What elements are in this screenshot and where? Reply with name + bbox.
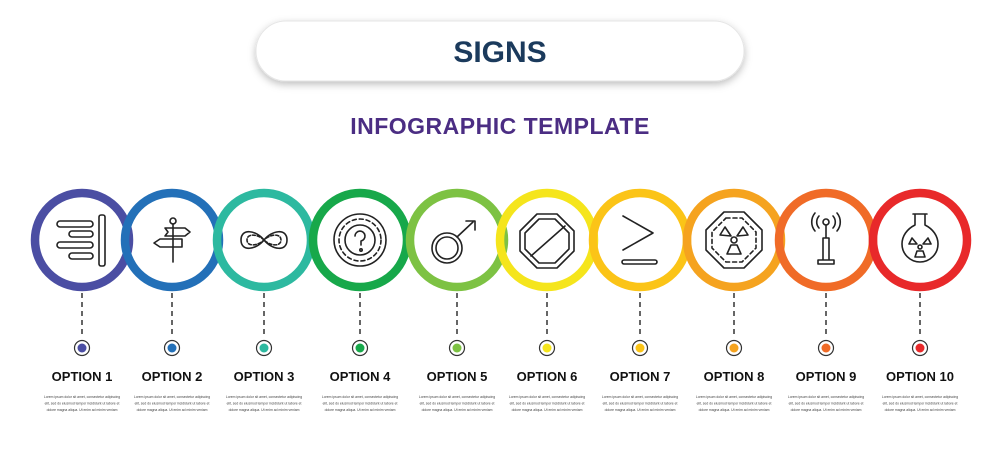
description texts: elit, sed do eiusmod tempor incididunt ut labore et [697,402,771,406]
option labels [52,369,954,384]
description texts: dolore magna aliqua. Ut enim ad minim veniam [605,408,676,412]
dashed connectors [82,293,920,338]
description texts: elit, sed do eiusmod tempor incididunt ut labore et [135,402,209,406]
icon: prohibited octagon [520,214,574,268]
option labels: OPTION 6 [517,369,577,384]
description texts: elit, sed do eiusmod tempor incididunt ut labore et [323,402,397,406]
option labels: OPTION 5 [427,369,487,384]
icon: flask [902,214,938,262]
option labels: OPTION 1 [52,369,112,384]
description texts: elit, sed do eiusmod tempor incididunt ut labore et [45,402,119,406]
description texts: Lorem ipsum dolor sit amet, consectetur adipiscing [788,395,864,399]
description texts: dolore magna aliqua. Ut enim ad minim veniam [791,408,862,412]
option labels: OPTION 7 [610,369,670,384]
description texts: Lorem ipsum dolor sit amet, consectetur adipiscing [602,395,678,399]
icons [57,212,938,268]
description texts: dolore magna aliqua. Ut enim ad minim veniam [512,408,583,412]
description texts: elit, sed do eiusmod tempor incididunt ut labore et [420,402,494,406]
icon: male [432,221,475,263]
icon: bars [57,215,105,266]
description texts: elit, sed do eiusmod tempor incididunt ut labore et [227,402,301,406]
description texts: elit, sed do eiusmod tempor incididunt ut labore et [789,402,863,406]
option labels: OPTION 8 [704,369,764,384]
option labels: OPTION 3 [234,369,294,384]
option labels: OPTION 10 [886,369,954,384]
description texts: elit, sed do eiusmod tempor incididunt ut labore et [510,402,584,406]
description texts: dolore magna aliqua. Ut enim ad minim veniam [229,408,300,412]
description texts: dolore magna aliqua. Ut enim ad minim veniam [885,408,956,412]
dot fills [78,344,924,352]
description texts: Lorem ipsum dolor sit amet, consectetur adipiscing [44,395,120,399]
dot outlines [74,340,928,356]
description texts: dolore magna aliqua. Ut enim ad minim veniam [699,408,770,412]
description texts: dolore magna aliqua. Ut enim ad minim veniam [137,408,208,412]
icon: radiation octagon [706,212,762,268]
subtitle: INFOGRAPHIC TEMPLATE [350,113,650,139]
description texts: Lorem ipsum dolor sit amet, consectetur adipiscing [882,395,958,399]
description texts: Lorem ipsum dolor sit amet, consectetur adipiscing [509,395,585,399]
title pill [256,21,744,81]
description texts: dolore magna aliqua. Ut enim ad minim veniam [325,408,396,412]
description texts: Lorem ipsum dolor sit amet, consectetur adipiscing [226,395,302,399]
icon: signpost [154,218,190,262]
description texts: Lorem ipsum dolor sit amet, consectetur adipiscing [419,395,495,399]
description texts: dolore magna aliqua. Ut enim ad minim veniam [47,408,118,412]
icon: antenna [812,213,840,264]
description texts: elit, sed do eiusmod tempor incididunt ut labore et [603,402,677,406]
rings [35,193,967,287]
description texts: Lorem ipsum dolor sit amet, consectetur adipiscing [134,395,210,399]
icon: greater or equal [622,216,657,264]
icon: question coin [334,214,386,266]
option labels: OPTION 4 [330,369,391,384]
title pill: SIGNS [453,36,547,69]
description texts: elit, sed do eiusmod tempor incididunt ut labore et [883,402,957,406]
description texts: Lorem ipsum dolor sit amet, consectetur adipiscing [696,395,772,399]
option labels: OPTION 9 [796,369,856,384]
icon: infinity [241,232,287,248]
description texts [44,395,958,412]
description texts: Lorem ipsum dolor sit amet, consectetur adipiscing [322,395,398,399]
option labels: OPTION 2 [142,369,202,384]
description texts: dolore magna aliqua. Ut enim ad minim veniam [422,408,493,412]
